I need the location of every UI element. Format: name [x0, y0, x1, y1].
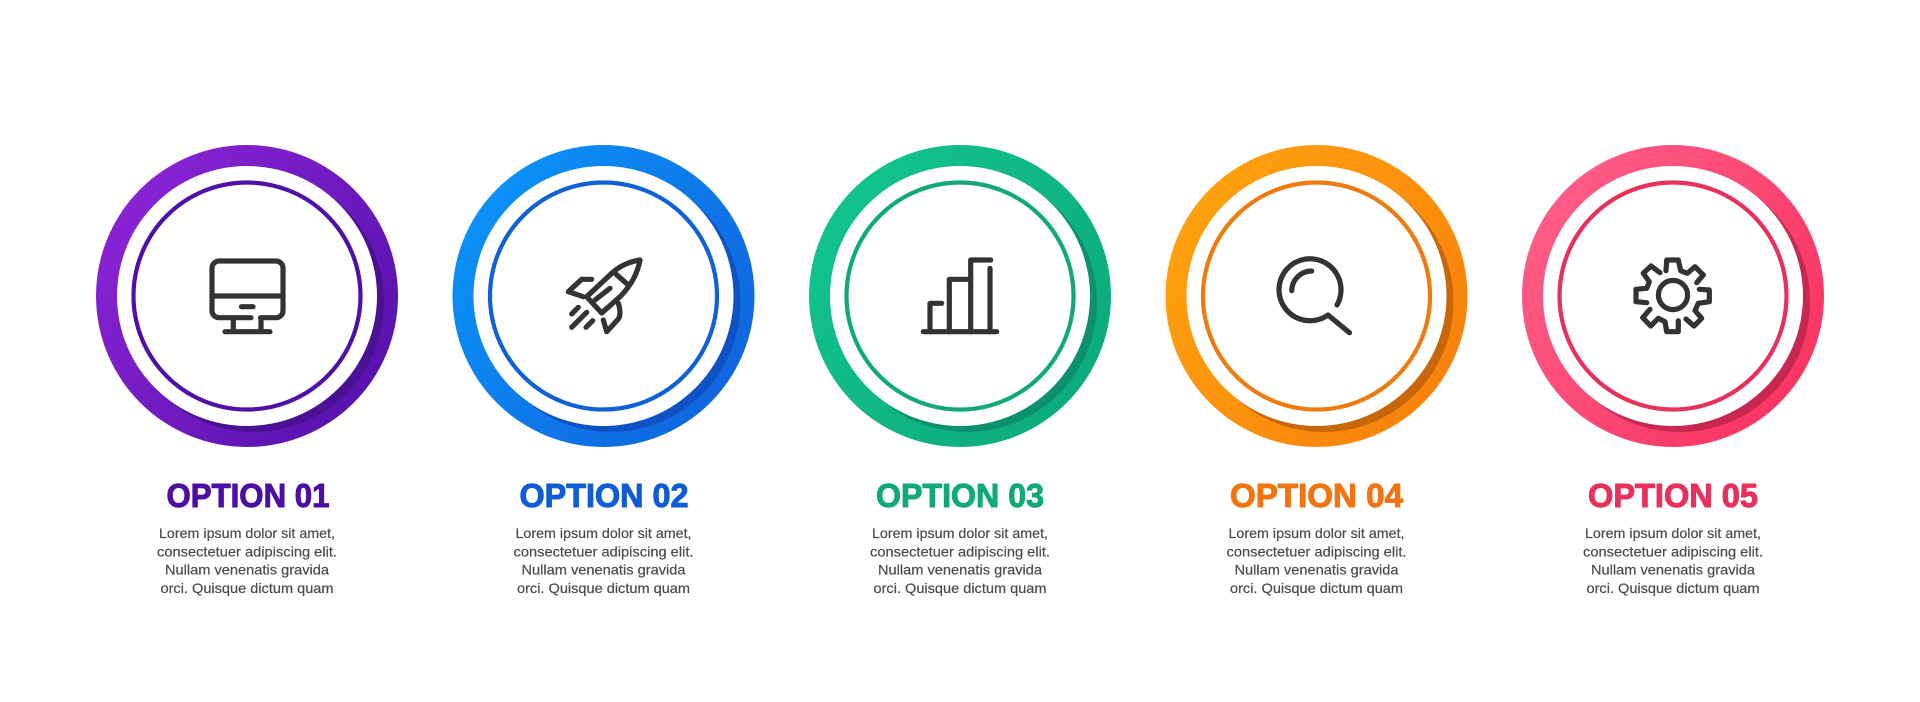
description 01 [157, 525, 337, 596]
icon: gear [1636, 260, 1709, 332]
description 03: Lorem ipsum dolor sit amet, [872, 525, 1048, 541]
description 02: Nullam venenatis gravida [522, 562, 686, 578]
icon: bar chart [923, 260, 997, 332]
heading: option 02: OPTION 02 [520, 477, 688, 514]
description 03: Nullam venenatis gravida [878, 562, 1042, 578]
description 02: orci. Quisque dictum quam [517, 580, 690, 596]
panel: option 01 [96, 145, 398, 596]
description 01: orci. Quisque dictum quam [160, 580, 334, 596]
description 02: Lorem ipsum dolor sit amet, [516, 525, 692, 541]
description 02 [514, 525, 694, 596]
description 01: consectetuer adipiscing elit. [157, 543, 337, 559]
panel: option 03 [809, 145, 1111, 596]
heading: option 03: OPTION 03 [876, 477, 1044, 514]
description 04 [1226, 525, 1406, 596]
ring badge 02 [452, 145, 754, 447]
description 05: orci. Quisque dictum quam [1586, 580, 1760, 596]
description 03 [870, 525, 1050, 596]
panel: option 04 [1166, 145, 1468, 596]
icon: magnifying glass [1279, 259, 1350, 333]
description 05: consectetuer adipiscing elit. [1583, 543, 1763, 559]
description 02: consectetuer adipiscing elit. [514, 543, 694, 559]
description 04: Nullam venenatis gravida [1234, 562, 1399, 578]
ring badge 04 [1166, 145, 1468, 447]
heading: option 01: OPTION 01 [166, 477, 330, 514]
description 04: Lorem ipsum dolor sit amet, [1228, 525, 1404, 541]
description 05: Lorem ipsum dolor sit amet, [1585, 525, 1761, 541]
icon: desktop monitor [212, 261, 283, 332]
description 05: Nullam venenatis gravida [1591, 562, 1755, 578]
ring badge 03 [809, 145, 1111, 447]
heading: option 05: OPTION 05 [1588, 477, 1758, 514]
icon: rocket [568, 260, 640, 332]
ring badge 05 [1522, 145, 1824, 447]
description 01: Nullam venenatis gravida [165, 562, 329, 578]
description 03: consectetuer adipiscing elit. [870, 543, 1050, 559]
ring badge 01 [96, 145, 398, 447]
panel: option 05 [1522, 145, 1824, 596]
description 04: orci. Quisque dictum quam [1230, 580, 1403, 596]
description 04: consectetuer adipiscing elit. [1226, 543, 1406, 559]
description 05 [1583, 525, 1763, 596]
heading: option 04: OPTION 04 [1230, 477, 1404, 514]
description 03: orci. Quisque dictum quam [874, 580, 1046, 596]
panel: option 02 [452, 145, 754, 596]
description 01: Lorem ipsum dolor sit amet, [159, 525, 335, 541]
